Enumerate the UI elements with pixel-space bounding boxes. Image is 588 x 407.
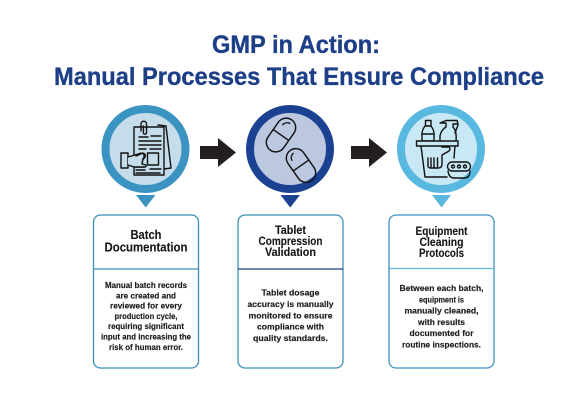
- title: Manual Processes That Ensure Compliance: [54, 63, 544, 91]
- heading: batch documentation: Documentation: [104, 240, 188, 254]
- icon: cleaning bucket: [416, 120, 470, 178]
- heading: tablet compression validation: Tablet: [275, 223, 306, 237]
- text: equipment cleaning body: equipment is: [419, 294, 464, 304]
- arrow: second to third: [351, 138, 387, 167]
- panel: tablet compression validation: [238, 215, 343, 368]
- text: tablet compression body: compliance with: [257, 322, 324, 332]
- text: tablet compression body: quality standards.: [253, 333, 328, 343]
- text: batch documentation body: Manual batch records: [105, 280, 187, 290]
- text: equipment cleaning body: routine inspections.: [402, 340, 481, 350]
- heading: batch documentation: [104, 227, 188, 254]
- text: batch documentation body: requiring significant: [108, 321, 184, 331]
- heading: equipment cleaning protocols: Protocols: [419, 246, 464, 260]
- heading: tablet compression validation: Compression: [258, 234, 322, 248]
- icon: capsule one: [263, 114, 299, 156]
- heading: tablet compression validation: [258, 223, 322, 259]
- heading: equipment cleaning protocols: [416, 224, 468, 260]
- text: equipment cleaning body: with results: [417, 317, 465, 327]
- text: tablet compression body: accuracy is manually: [248, 299, 334, 309]
- text: batch documentation body: are created and: [116, 290, 176, 300]
- icon: document with hand: [121, 121, 171, 175]
- panel: batch documentation: [94, 215, 198, 368]
- heading: equipment cleaning protocols: Equipment: [416, 224, 468, 238]
- text: tablet compression body: Tablet dosage: [262, 288, 320, 298]
- marker: batch documentation: [106, 109, 186, 208]
- heading: tablet compression validation: Validation: [265, 245, 316, 259]
- heading: equipment cleaning protocols: Cleaning: [420, 235, 464, 249]
- text: equipment cleaning body: [400, 283, 484, 350]
- panel: equipment cleaning protocols: [388, 215, 494, 368]
- text: batch documentation body: reviewed for every: [110, 301, 182, 311]
- text: batch documentation body: production cycle,: [114, 311, 178, 321]
- text: equipment cleaning body: documented for: [410, 328, 474, 338]
- text: equipment cleaning body: Between each batch,: [400, 283, 484, 293]
- marker: equipment cleaning: [401, 109, 481, 208]
- text: batch documentation body: input and increasing the: [101, 332, 191, 342]
- text: tablet compression body: [248, 288, 334, 343]
- icon: capsule two: [283, 145, 319, 186]
- text: equipment cleaning body: manually cleaned,: [404, 306, 478, 316]
- text: batch documentation body: [101, 280, 191, 352]
- marker: tablet compression: [250, 109, 330, 208]
- arrow: first to second: [200, 138, 236, 167]
- title: [54, 31, 544, 91]
- heading: batch documentation: Batch: [130, 227, 162, 242]
- text: tablet compression body: monitored to ensure: [248, 310, 333, 320]
- text: batch documentation body: risk of human error.: [109, 342, 183, 352]
- title: GMP in Action:: [212, 31, 380, 59]
